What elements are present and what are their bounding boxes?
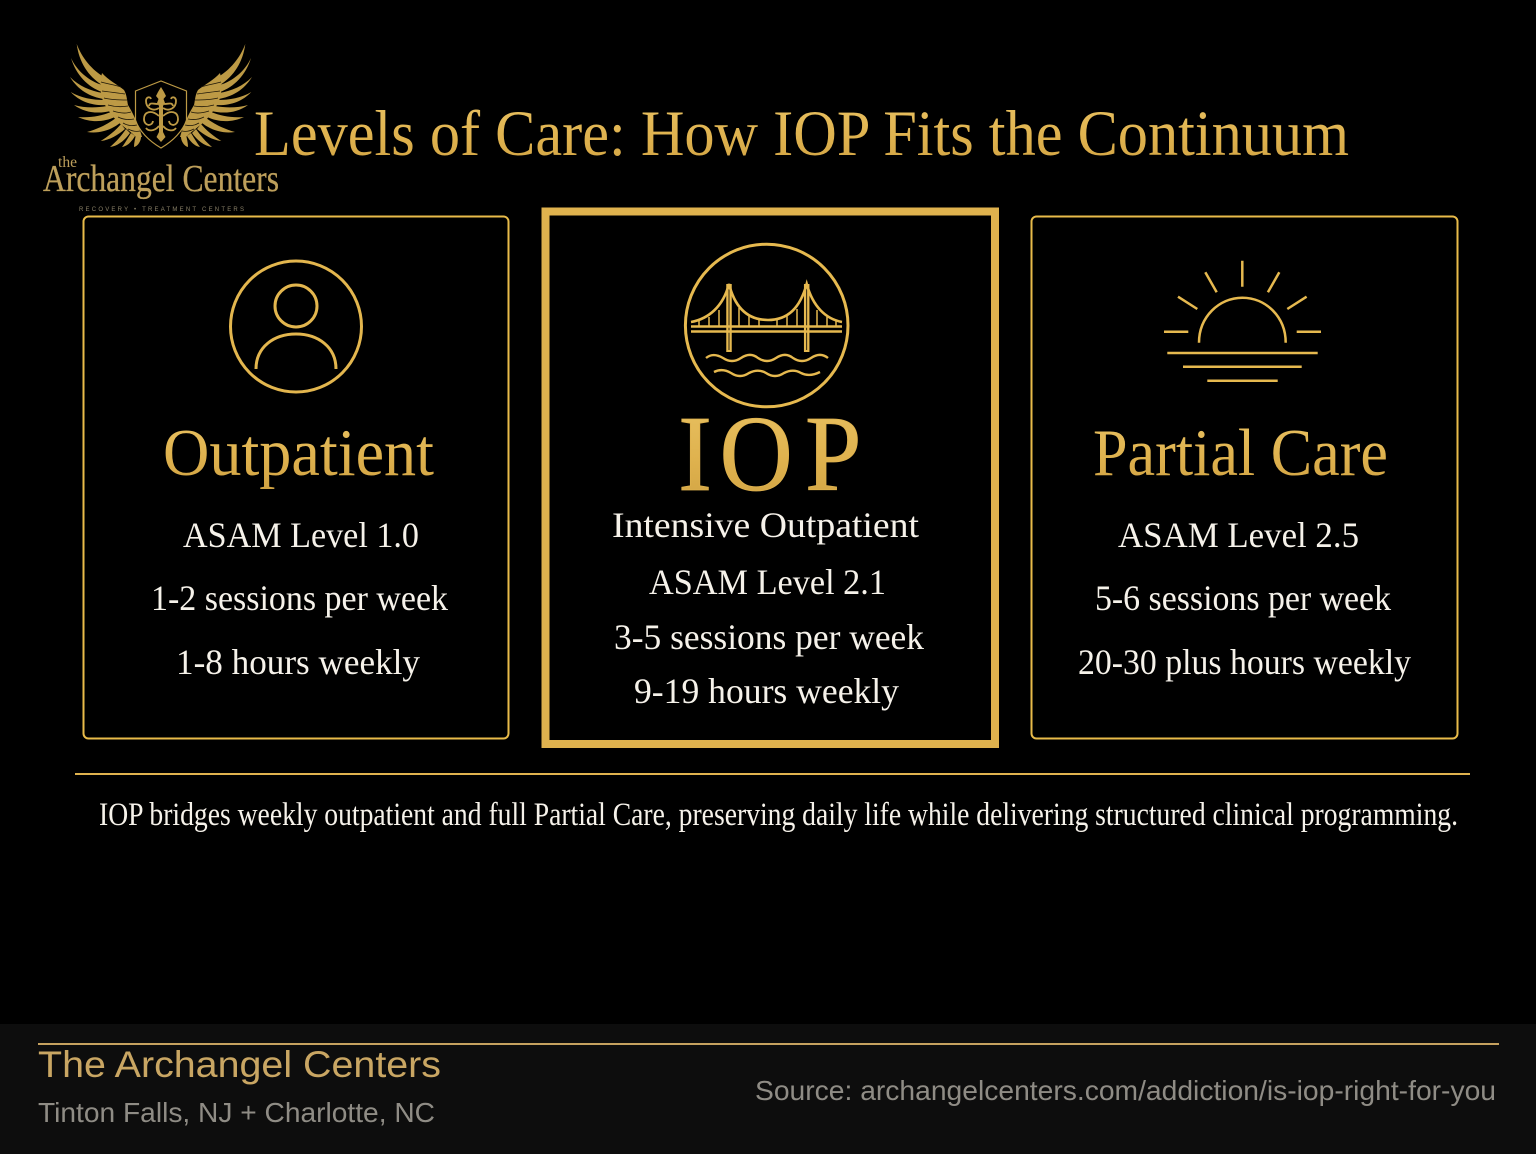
panel border — [84, 216, 508, 738]
heading: IOP: IOP — [678, 394, 861, 514]
detail: sessions: 5-6 sessions per week — [1095, 578, 1391, 618]
footer locations: Tinton Falls, NJ + Charlotte, NC — [38, 1097, 435, 1128]
panel border — [546, 212, 995, 744]
detail: hours: 1-8 hours weekly — [176, 642, 420, 682]
detail: sessions: 1-2 sessions per week — [151, 578, 448, 618]
icon: person — [230, 261, 362, 392]
panel: Partial Care — [1032, 216, 1458, 738]
panel: IOP (highlighted) — [546, 212, 995, 744]
footer organisation name: The Archangel Centers — [38, 1044, 441, 1085]
detail: ASAM level: ASAM Level 1.0 — [183, 515, 419, 555]
left wing — [70, 44, 142, 147]
heading: Outpatient: Outpatient — [163, 416, 434, 490]
footer source: Source: archangelcenters.com/addiction/is-iop-right-for-you — [755, 1075, 1496, 1106]
logo text: Archangel Centers: Archangel Centers — [43, 158, 279, 200]
icon: sunrise — [1164, 261, 1321, 381]
logo tagline: RECOVERY • TREATMENT CENTERS — [79, 207, 244, 213]
detail: hours: 20-30 plus hours weekly — [1078, 642, 1411, 682]
logo text: the: the — [58, 154, 77, 171]
detail: full name: Intensive Outpatient — [612, 505, 919, 545]
title: Levels of Care: How IOP Fits the Continuum — [254, 98, 1349, 170]
logo: The Archangel Centers — [43, 44, 279, 213]
detail: hours: 9-19 hours weekly — [634, 671, 899, 711]
detail: ASAM level: ASAM Level 2.5 — [1118, 515, 1359, 555]
detail: ASAM level: ASAM Level 2.1 — [649, 562, 886, 602]
icon: winged shield — [70, 44, 252, 148]
heading: Partial Care: Partial Care — [1093, 416, 1388, 490]
icon: bridge in circle — [685, 244, 848, 407]
detail: sessions: 3-5 sessions per week — [614, 617, 924, 657]
panel border — [1032, 216, 1458, 738]
panel: Outpatient — [84, 216, 508, 738]
right wing — [180, 44, 252, 147]
footer band — [0, 1024, 1536, 1154]
footer background — [0, 1024, 1536, 1154]
shield with fleur — [136, 81, 186, 148]
